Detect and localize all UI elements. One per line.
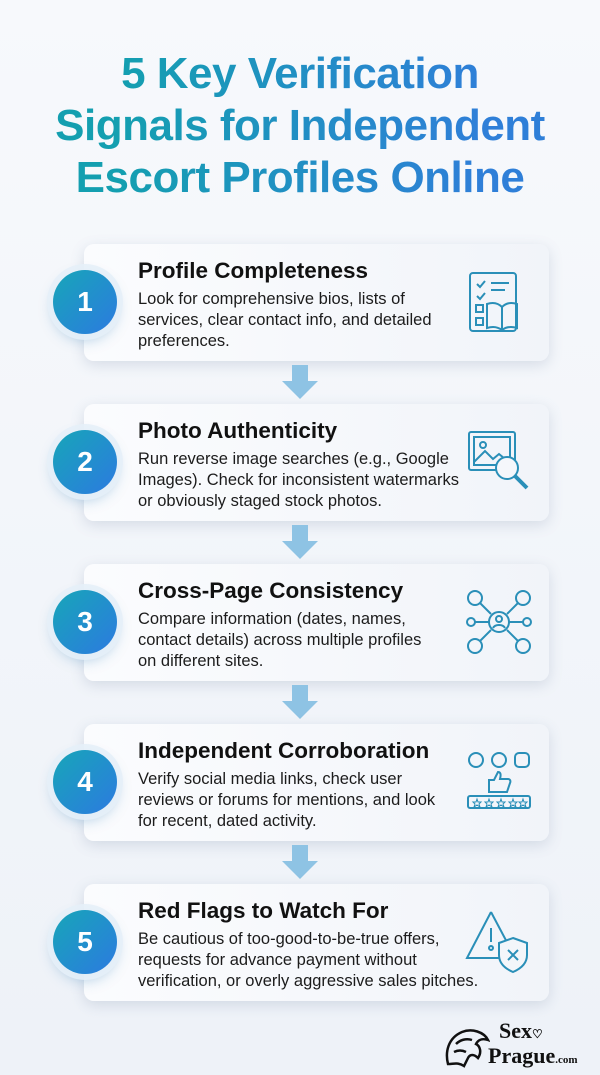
arrow 4 [282,845,318,879]
card 3: contact details) across multiple profiles [138,631,421,649]
arrow 2 [282,525,318,559]
icon: image search [468,431,528,490]
card 1: services, clear contact info, and detailed [138,311,432,329]
card 2: Images). Check for inconsistent watermarks [138,471,459,489]
title: Signals for Independent [55,101,545,150]
card 3: Compare information (dates, names, [138,610,406,628]
card 2 [84,404,549,521]
card 3: on different sites. [138,652,263,670]
arrow 3 [282,685,318,719]
icon: network [466,590,532,654]
card 5 [84,884,549,1001]
number 5: 5 [77,926,93,957]
card 4: reviews or forums for mentions, and look [138,791,435,809]
icon: warning shield [465,912,528,974]
logo text: Prague.com [488,1043,578,1068]
card 2: Photo Authenticity [138,418,337,443]
card 5: Be cautious of too-good-to-be-true offers, [138,930,439,948]
card 4: Independent Corroboration [138,738,429,763]
logo mark [446,1029,490,1068]
card 5: Red Flags to Watch For [138,898,388,923]
card 5: requests for advance payment without [138,951,417,969]
card 4: Verify social media links, check user [138,770,402,788]
number 3 [53,590,117,654]
arrow 1 [282,365,318,399]
title: 5 Key Verification [121,49,479,98]
number 4 [53,750,117,814]
card 1: Profile Completeness [138,258,368,283]
number 2: 2 [77,446,93,477]
number 1 [53,270,117,334]
card 2: or obviously staged stock photos. [138,492,382,510]
card 1: Look for comprehensive bios, lists of [138,290,405,308]
card 3: Cross-Page Consistency [138,578,403,603]
number 3: 3 [77,606,93,637]
logo text [488,1018,578,1068]
card 2: Run reverse image searches (e.g., Google [138,450,449,468]
number 1: 1 [77,286,93,317]
number 2 [53,430,117,494]
card 4: for recent, dated activity. [138,812,317,830]
card 1 [84,244,549,361]
title: Escort Profiles Online [76,153,524,202]
number 4: 4 [77,766,93,797]
icon: social reviews [467,752,531,809]
card 5: verification, or overly aggressive sales pitches. [138,972,478,990]
title [0,48,600,204]
card 1: preferences. [138,332,230,350]
icon: checklist book [469,272,518,332]
card 3 [84,564,549,681]
card 4 [84,724,549,841]
logo [446,1018,578,1068]
logo text: Sex♡ [499,1018,543,1043]
number 5 [53,910,117,974]
